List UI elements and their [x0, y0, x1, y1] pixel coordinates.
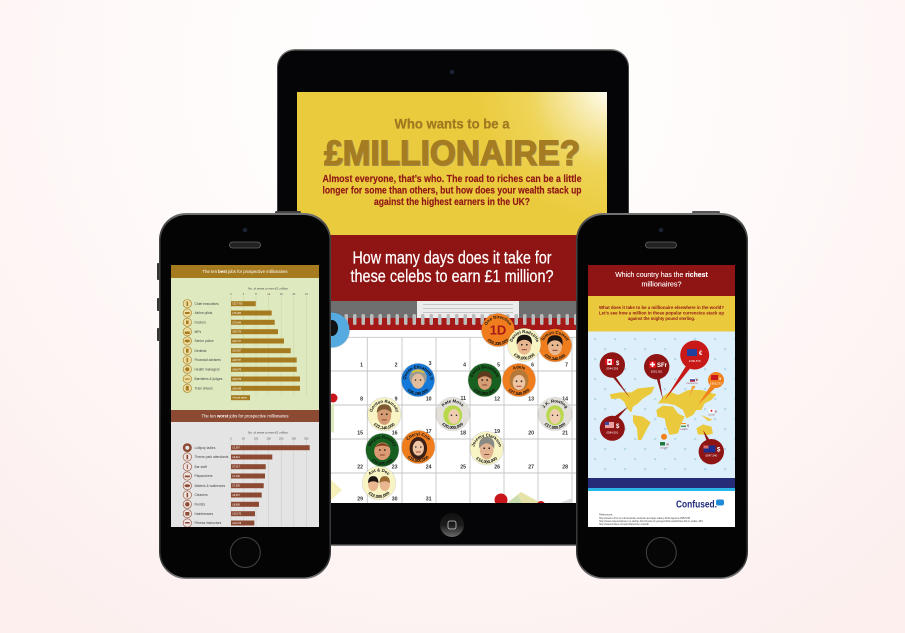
- references: http://www.careertrainers.co.uk/top-10-rich-list-of-young-british-celebrities-30-or-under-163: [599, 519, 703, 523]
- worst jobs bar chart: 250: [292, 436, 297, 440]
- red banner: these celebs to earn £1 million?: [350, 266, 554, 286]
- best jobs bar chart: Senior police: [194, 339, 214, 343]
- pin: Eurozone: £790,579: [689, 359, 701, 363]
- pin: Russia: ₽: [696, 378, 698, 382]
- worst jobs bar chart: Waiters & waitresses: [194, 484, 226, 488]
- pin: United States: £584,501: [606, 430, 619, 434]
- best jobs header: The ten best jobs for prospective millionaires: [202, 269, 288, 275]
- best jobs bar chart: 8: [255, 292, 257, 296]
- celeb chip: Ant and Dec: Ant & Dec: [368, 468, 390, 476]
- best jobs bar chart: £66,706: [232, 331, 242, 334]
- best jobs bar chart: £48,797: [232, 359, 242, 362]
- celeb chip: average salary: [331, 312, 350, 348]
- calendar day numbers: 4: [463, 362, 466, 368]
- best jobs bar chart: 24: [305, 292, 308, 296]
- celeb chip: David Beckham: [468, 363, 502, 397]
- celeb chip: Jeremy Clarkson: £14,000,000: [476, 457, 497, 464]
- footer stripes: [588, 478, 735, 527]
- calendar day numbers: 31: [426, 496, 432, 502]
- red banner: How many days does it take for: [352, 248, 552, 268]
- celeb chip: One Direction: One Direction: [484, 315, 512, 326]
- worst jobs bar chart: Theme park attendants: [194, 455, 229, 459]
- pin: Switzerland: [644, 354, 669, 400]
- best jobs bar chart: Chief executives: [194, 302, 219, 306]
- pin: Australia: £547,540: [705, 454, 718, 458]
- calendar day numbers: 25: [460, 464, 466, 470]
- pin: Russia: £34,561,710: [686, 383, 698, 385]
- right phone screen: [588, 265, 735, 527]
- best jobs bar chart: Annual salary: [232, 397, 248, 400]
- pin: Canada: [600, 352, 630, 398]
- celeb chip: Kate Moss: Kate Moss: [441, 399, 464, 406]
- worst jobs bar chart: 100: [254, 436, 259, 440]
- calendar day numbers: 24: [426, 464, 432, 470]
- worst jobs bar chart: Florists: [194, 502, 205, 506]
- worst jobs bar chart: £7,317: [232, 466, 240, 469]
- richest intro text: against the mighty pound sterling.: [628, 316, 695, 321]
- calendar day numbers: [357, 361, 568, 502]
- calendar day numbers: 21: [562, 430, 568, 436]
- richest intro text: Let’s see how a million in these popular currencies stack up: [599, 310, 724, 315]
- calendar day numbers: 16: [392, 430, 398, 436]
- calendar day numbers: 8: [360, 396, 363, 402]
- celeb chip: Adele: Adele: [513, 365, 526, 370]
- calendar day numbers: 27: [528, 464, 534, 470]
- best jobs bar chart: No. of years to earn £1 million: [248, 286, 288, 290]
- calendar day numbers: 3: [429, 361, 432, 367]
- worst jobs bar chart: 150: [267, 436, 271, 440]
- subtitle: who wants to be a: Who wants to be a: [394, 116, 510, 132]
- celeb chip: J.K. Rowling: £17,000,000: [544, 422, 566, 430]
- references: [599, 512, 703, 526]
- calendar day numbers: 12: [494, 396, 500, 402]
- best jobs bar chart: 16: [280, 292, 283, 296]
- pin: Japan: [708, 409, 717, 416]
- calendar day numbers: 28: [562, 464, 568, 470]
- richest heading: Which country has the richest: [615, 272, 708, 279]
- intro text: longer for some than others, but how does your wealth stack up: [322, 185, 582, 196]
- celeb chip: Jeremy Clarkson: [470, 431, 504, 466]
- calendar day numbers: 30: [392, 496, 398, 502]
- calendar day numbers: 10: [426, 396, 432, 402]
- red banner: [330, 235, 576, 301]
- left phone screen: [171, 265, 319, 527]
- celeb chip: Wayne Rooney: £15,600,000: [372, 458, 392, 466]
- pin: Japan: ¥: [715, 410, 717, 414]
- celeb chip: One Direction: 1D: [490, 322, 506, 338]
- best jobs bar chart: 0: [230, 292, 232, 296]
- pin: South Africa: R: [666, 442, 670, 446]
- calendar day numbers: 1: [360, 362, 363, 368]
- best jobs bar chart: £53,587: [232, 350, 242, 353]
- right phone: [576, 211, 748, 579]
- worst jobs bar chart: 300: [304, 436, 309, 440]
- worst jobs bar chart: 0: [230, 436, 232, 440]
- pin: Eurozone: €: [699, 351, 703, 357]
- worst jobs bar chart: £3,387: [232, 447, 240, 450]
- title: millionaire: £MILLIONAIRE?: [325, 135, 581, 174]
- worst jobs header: The ten worst jobs for prospective millionaires: [202, 414, 289, 420]
- calendar day numbers: 2: [395, 362, 398, 368]
- worst jobs bar chart: £6,914: [232, 456, 240, 459]
- celeb chip: One Direction: [481, 313, 515, 347]
- worst jobs bar chart: 50: [242, 436, 245, 440]
- calendar day numbers: 20: [528, 430, 534, 436]
- pin: China: £565,271: [710, 382, 722, 386]
- calendar day numbers: 19: [494, 429, 500, 435]
- celeb chip: One Direction: £53,330,000: [487, 338, 508, 346]
- worst jobs bar chart: £7,400: [232, 475, 240, 478]
- best jobs bar chart: Doctors: [194, 320, 206, 324]
- pin: China: ¥: [719, 376, 722, 381]
- pin: China: [698, 372, 724, 405]
- richest intro text: What does it take to be a millionaire elsewhere in the world?: [599, 305, 724, 310]
- celeb chip: Ant and Dec: £12,000,000: [368, 492, 390, 498]
- richest heading: millionaires?: [642, 281, 682, 288]
- calendar day numbers: 7: [565, 362, 568, 368]
- worst jobs header: [171, 410, 319, 422]
- best jobs bar chart: £48,679: [232, 368, 242, 371]
- best jobs bar chart: Barristers & judges: [194, 377, 223, 381]
- best jobs bar chart: Airline pilots: [194, 311, 213, 315]
- best jobs bar chart: [183, 286, 308, 400]
- celeb chip: Kate Moss: £20,000,000: [442, 422, 463, 430]
- best jobs bar chart: Train drivers: [194, 386, 213, 390]
- pin: United States: $: [616, 424, 620, 430]
- worst jobs bar chart: Playworkers: [194, 474, 213, 478]
- confused logo: Confused.: [676, 500, 717, 510]
- celeb chip: Wayne Rooney: [365, 433, 400, 467]
- calendar day numbers: 11: [461, 396, 466, 402]
- world map panel: [588, 332, 735, 478]
- worst jobs bar chart: 200: [279, 436, 284, 440]
- celeb chip: Cheryl Cole: £15,500,000: [408, 456, 428, 462]
- pin: India: [680, 423, 689, 431]
- references: http://www.mirror.co.uk/news/uk-news/uk-average-salary-2014-figures-3952705: [599, 516, 691, 520]
- pin: South Africa: [660, 434, 670, 450]
- intro text: Almost everyone, that’s who. The road to riches can be a little: [322, 174, 582, 185]
- pin: Australia: [699, 430, 724, 464]
- title: millionaire: [324, 140, 580, 166]
- intro text: [322, 174, 582, 208]
- worst jobs bar chart: [183, 430, 310, 527]
- calendar day numbers: 29: [357, 496, 363, 502]
- celeb chip: Queen Elizabeth II: Queen Elizabeth II: [402, 365, 434, 380]
- calendar day numbers: 6: [531, 362, 534, 368]
- worst jobs bar chart: Lollipop ladies: [194, 446, 216, 450]
- calendar day numbers: 23: [392, 464, 398, 470]
- celeb chip: Daniel Radcliffe: Daniel Radcliffe: [510, 330, 538, 342]
- celeb chip: Kate Moss: [436, 397, 470, 431]
- celeb chip: Daniel Radcliffe: [507, 328, 542, 362]
- calendar day numbers: 18: [460, 430, 466, 436]
- celeb chip: Gordon Ramsay: Gordon Ramsay: [370, 400, 399, 412]
- pin: Canada: £544,359: [606, 366, 619, 370]
- left phone: [157, 211, 331, 579]
- calendar day numbers: 17: [426, 429, 432, 435]
- celeb chip: Daniel Radcliffe: £39,000,000: [514, 354, 534, 360]
- celeb chip: Ant and Dec: [362, 466, 396, 500]
- best jobs bar chart: £73,646: [232, 321, 242, 324]
- calendar day numbers: 13: [528, 396, 534, 402]
- pin: Canada: $: [616, 361, 620, 367]
- tablet screen: [297, 92, 607, 503]
- celeb chip: J.K. Rowling: J.K. Rowling: [542, 400, 568, 408]
- worst jobs bar chart: No. of years to earn £1 million: [248, 430, 288, 434]
- richest intro text: [588, 296, 735, 332]
- calendar day numbers: 9: [395, 396, 398, 402]
- celeb chip: David Beckham: David Beckham: [470, 366, 499, 377]
- worst jobs bar chart: £8,869: [232, 503, 240, 506]
- celeb chip: Cheryl Cole: [401, 430, 436, 464]
- best jobs bar chart: Financial advisers: [194, 358, 221, 362]
- tablet device: [277, 49, 629, 546]
- celeb chip: Simon Cowell: [539, 328, 572, 362]
- desk decorations: [326, 394, 572, 509]
- best jobs bar chart: £227,700: [232, 303, 243, 306]
- celeb chip: David Beckham: £30,000,000: [474, 388, 495, 396]
- best jobs bar chart: Health managers: [194, 367, 220, 371]
- pin: Australia: $: [717, 448, 721, 454]
- pin: India: ₹: [687, 424, 689, 428]
- worst jobs bar chart: Fitness instructors: [194, 521, 222, 525]
- pin: Switzerland: £561,021: [651, 370, 663, 374]
- worst jobs bar chart: £10,170: [232, 513, 242, 516]
- celeb chip: Gordon Ramsay: £22,140,000: [374, 423, 394, 430]
- calendar day numbers: 22: [357, 464, 363, 470]
- pin: Switzerland: SFr: [657, 363, 668, 369]
- celeb chip: Adele: [502, 363, 536, 397]
- best jobs bar chart: £75,482: [232, 312, 242, 315]
- best jobs bar chart: Dentists: [194, 349, 207, 353]
- map: continents: [610, 387, 716, 440]
- calendar: [331, 301, 576, 503]
- celeb chip: J.K. Rowling: [538, 397, 572, 431]
- best jobs bar chart: 12: [267, 292, 271, 296]
- richest heading: [588, 265, 735, 296]
- worst jobs bar chart: £7,559: [232, 485, 240, 488]
- worst jobs bar chart: Bar staff: [194, 465, 207, 469]
- calendar day numbers: 5: [497, 362, 500, 368]
- best jobs bar chart: 20: [292, 292, 296, 296]
- pin: United States: [600, 407, 628, 441]
- best jobs bar chart: £45,575: [232, 378, 242, 381]
- pin: Eurozone: [665, 340, 709, 400]
- celeb chip: Jeremy Clarkson: Jeremy Clarkson: [472, 434, 502, 447]
- pin: Japan: £5,745: [708, 414, 715, 416]
- best jobs header: [171, 265, 319, 278]
- celeb chip: Simon Cowell: £33,340,000: [544, 354, 566, 360]
- celeb chip: Simon Cowell: Simon Cowell: [541, 330, 569, 341]
- calendar day numbers: 15: [357, 430, 363, 436]
- celeb chip: Wayne Rooney: Wayne Rooney: [368, 436, 396, 446]
- celeb chip: Cheryl Cole: Cheryl Cole: [406, 432, 430, 440]
- references: http://www.forbes.com/profile/simon-cowell/: [599, 522, 649, 526]
- pin: South Africa: £54,649: [660, 448, 668, 450]
- celeb chip: Adele: £27,540,000: [508, 388, 530, 396]
- worst jobs bar chart: Cleaners: [194, 493, 208, 497]
- intro text: against the highest earners in the UK?: [374, 197, 530, 208]
- celeb chip: Gordon Ramsay: [367, 397, 402, 432]
- best jobs bar chart: £45,449: [232, 387, 242, 390]
- celeb chip: Queen Elizabeth II: £36,190,000: [407, 388, 428, 396]
- pin: India: £96,151: [680, 429, 688, 431]
- best jobs bar chart: MPs: [194, 330, 201, 334]
- best jobs bar chart: £64,727: [232, 340, 242, 343]
- worst jobs bar chart: Hairdressers: [194, 512, 214, 516]
- celeb chip: Queen Elizabeth II: [401, 363, 435, 397]
- title: millionaire: £MILLIONAIRE?: [324, 134, 580, 173]
- calendar day numbers: 26: [494, 464, 500, 470]
- worst jobs bar chart: £8,067: [232, 494, 240, 497]
- best jobs bar chart: 4: [243, 292, 245, 296]
- worst jobs bar chart: £10,278: [232, 522, 242, 525]
- pin: Russia: [686, 378, 698, 398]
- calendar day numbers: 14: [562, 396, 568, 402]
- references: References:: [599, 512, 613, 516]
